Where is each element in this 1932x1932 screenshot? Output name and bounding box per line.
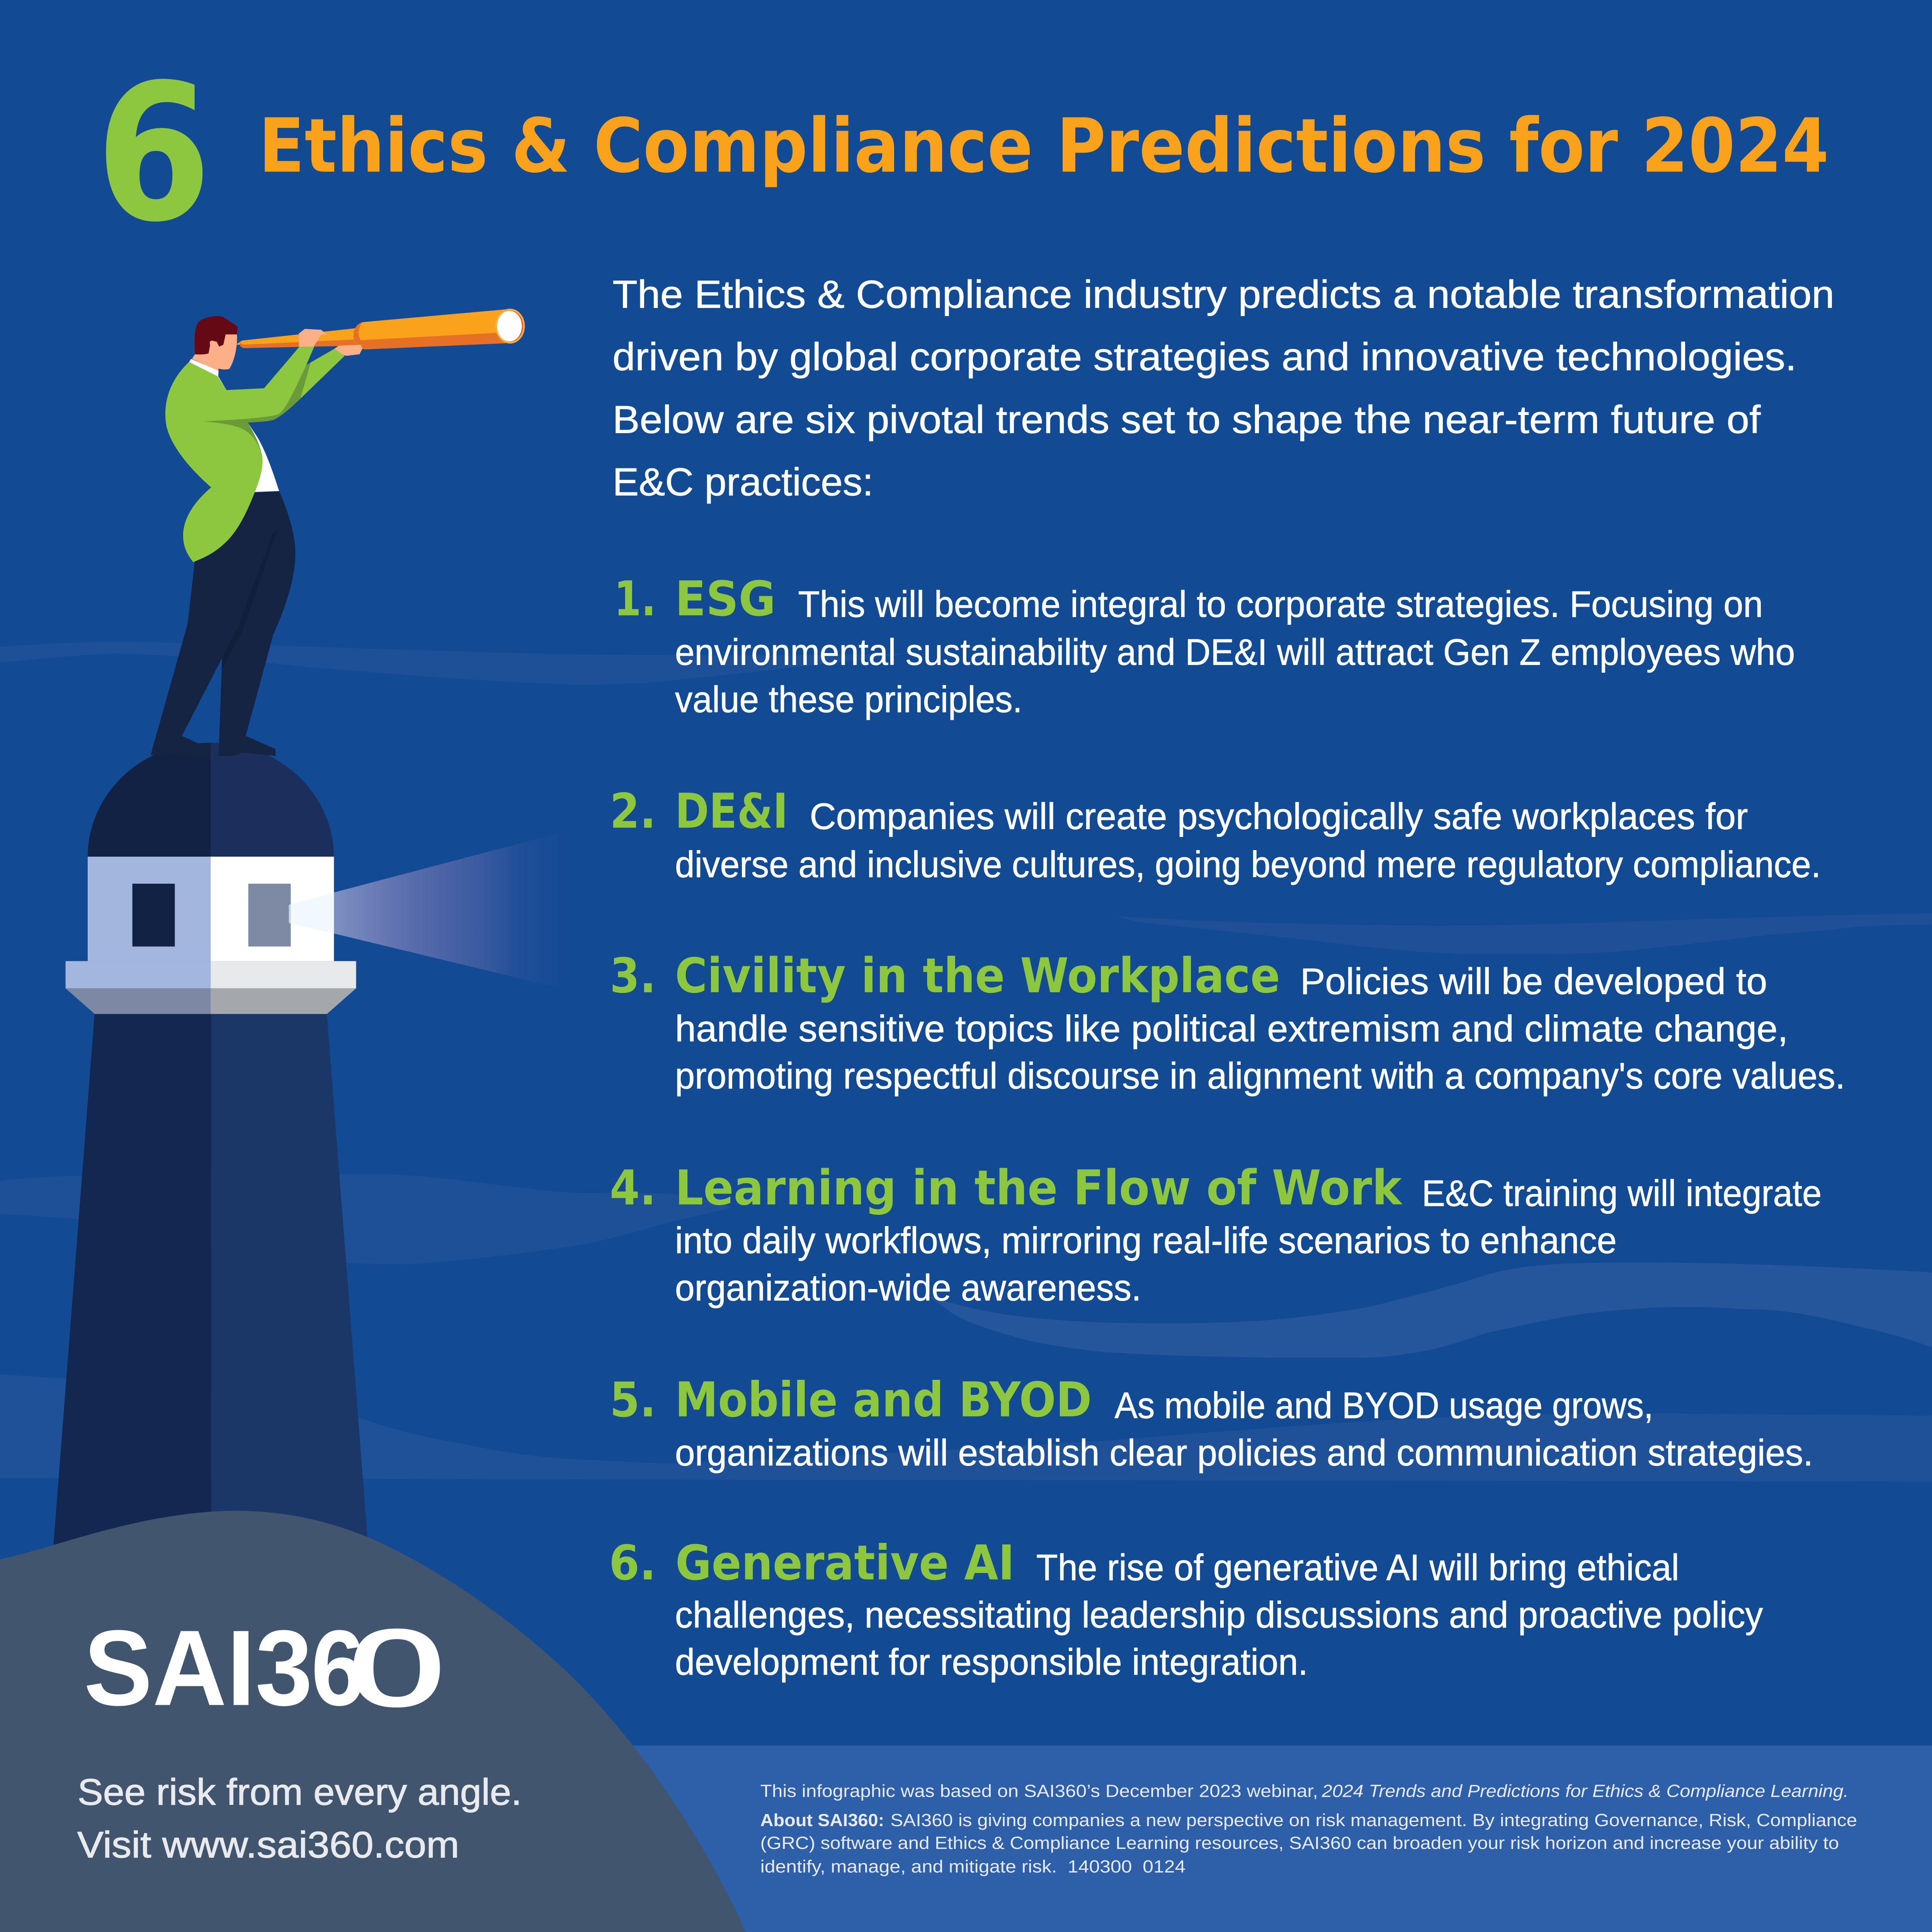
footer text: (GRC) software and Ethics & Compliance Learning resources, SAI360 can broaden your risk horizon and increase your ability to — [760, 1833, 1839, 1853]
intro paragraph: Below are six pivotal trends set to shape the near-term future of — [612, 398, 1761, 441]
intro paragraph: The Ethics & Compliance industry predicts a notable transformation — [612, 272, 1834, 316]
item 1: ESG — [614, 571, 1795, 720]
item 4: Learning in the Flow of Work: 4. — [610, 1160, 656, 1216]
item 6: Generative AI: The rise of generative AI will bring ethical — [1036, 1547, 1679, 1588]
trousers — [151, 491, 295, 757]
item 5: Mobile and BYOD: organizations will establish clear policies and communication strategies. — [675, 1432, 1813, 1473]
tagline — [77, 1771, 522, 1866]
grey hill — [0, 1511, 746, 1932]
footer text: identify, manage, and mitigate risk. 140300 0124 — [760, 1857, 1185, 1876]
item 1: ESG: environmental sustainability and DE&I will attract Gen Z employees who — [675, 631, 1795, 673]
item 1: ESG: value these principles. — [675, 679, 1022, 720]
item 6: Generative AI: 6. — [609, 1535, 656, 1591]
item 4: Learning in the Flow of Work: Learning in the Flow of Work — [675, 1160, 1403, 1216]
footer text: About SAI360: — [760, 1810, 884, 1830]
footer text: SAI360 is giving companies a new perspective on risk management. By integrating Governance, Risk, Compliance — [890, 1810, 1857, 1830]
white shirt — [248, 422, 279, 492]
SAI360 logo: 0 — [349, 1608, 444, 1728]
item 3: Civility in the Workplace — [610, 947, 1845, 1097]
item 3: Civility in the Workplace: Civility in the Workplace — [675, 947, 1280, 1003]
background waves — [0, 641, 1932, 1482]
item 4: Learning in the Flow of Work — [610, 1160, 1821, 1308]
item 2: DE&I — [610, 783, 1821, 885]
lighthouse lantern room — [66, 743, 356, 1014]
SAI360 logo: 6 — [311, 1608, 365, 1728]
tagline: Visit www.sai360.com — [77, 1824, 459, 1866]
item 2: DE&I: diverse and inclusive cultures, going beyond mere regulatory compliance. — [675, 844, 1821, 885]
item 4: Learning in the Flow of Work: E&C training will integrate — [1422, 1173, 1821, 1214]
intro paragraph: driven by global corporate strategies and innovative technologies. — [612, 335, 1796, 379]
item 3: Civility in the Workplace: handle sensitive topics like political extremism and climate change, — [675, 1008, 1788, 1049]
item 6: Generative AI: challenges, necessitating leadership discussions and proactive policy — [675, 1594, 1763, 1635]
intro paragraph — [612, 272, 1834, 504]
item 3: Civility in the Workplace: 3. — [610, 947, 656, 1003]
item 5: Mobile and BYOD: As mobile and BYOD usage grows, — [1115, 1385, 1653, 1426]
big number six: 6 — [96, 44, 211, 264]
item 4: Learning in the Flow of Work: into daily workflows, mirroring real-life scenarios to enhance — [675, 1220, 1617, 1261]
lighthouse tower body — [50, 1014, 371, 1587]
item 6: Generative AI — [609, 1535, 1763, 1683]
jacket shading — [203, 362, 311, 463]
SAI360 logo — [84, 1608, 444, 1728]
light beam — [289, 831, 566, 990]
footer text: This infographic was based on SAI360’s December 2023 webinar, — [760, 1781, 1318, 1801]
item 1: ESG: ESG — [675, 571, 776, 627]
item 2: DE&I: DE&I — [675, 783, 788, 839]
footer text: 2024 Trends and Predictions for Ethics & Compliance Learning. — [1321, 1781, 1849, 1801]
item 5: Mobile and BYOD — [610, 1372, 1813, 1473]
SAI360 logo: SAI3 — [84, 1608, 313, 1728]
item 3: Civility in the Workplace: Policies will be developed to — [1300, 961, 1767, 1002]
item 6: Generative AI: Generative AI — [675, 1535, 1015, 1591]
item 2: DE&I: 2. — [610, 783, 656, 839]
footer band — [386, 1746, 1932, 1932]
hands — [334, 345, 362, 356]
item 6: Generative AI: development for responsible integration. — [675, 1641, 1308, 1683]
item 1: ESG: 1. — [614, 571, 656, 627]
item 5: Mobile and BYOD: 5. — [610, 1372, 656, 1428]
tagline: See risk from every angle. — [78, 1771, 522, 1813]
item 3: Civility in the Workplace: promoting respectful discourse in alignment with a company's core values. — [675, 1055, 1845, 1097]
telescope — [235, 328, 355, 345]
item 5: Mobile and BYOD: Mobile and BYOD — [675, 1372, 1092, 1428]
green jacket — [165, 347, 345, 562]
hair — [195, 316, 238, 354]
collar — [189, 359, 226, 390]
face and neck — [192, 334, 237, 371]
intro paragraph: E&C practices: — [612, 460, 873, 504]
item 4: Learning in the Flow of Work: organization-wide awareness. — [675, 1267, 1141, 1308]
footer text — [760, 1781, 1857, 1876]
man with telescope — [151, 309, 525, 757]
item 2: DE&I: Companies will create psychologically safe workplaces for — [810, 796, 1748, 837]
item 1: ESG: This will become integral to corporate strategies. Focusing on — [798, 583, 1763, 625]
